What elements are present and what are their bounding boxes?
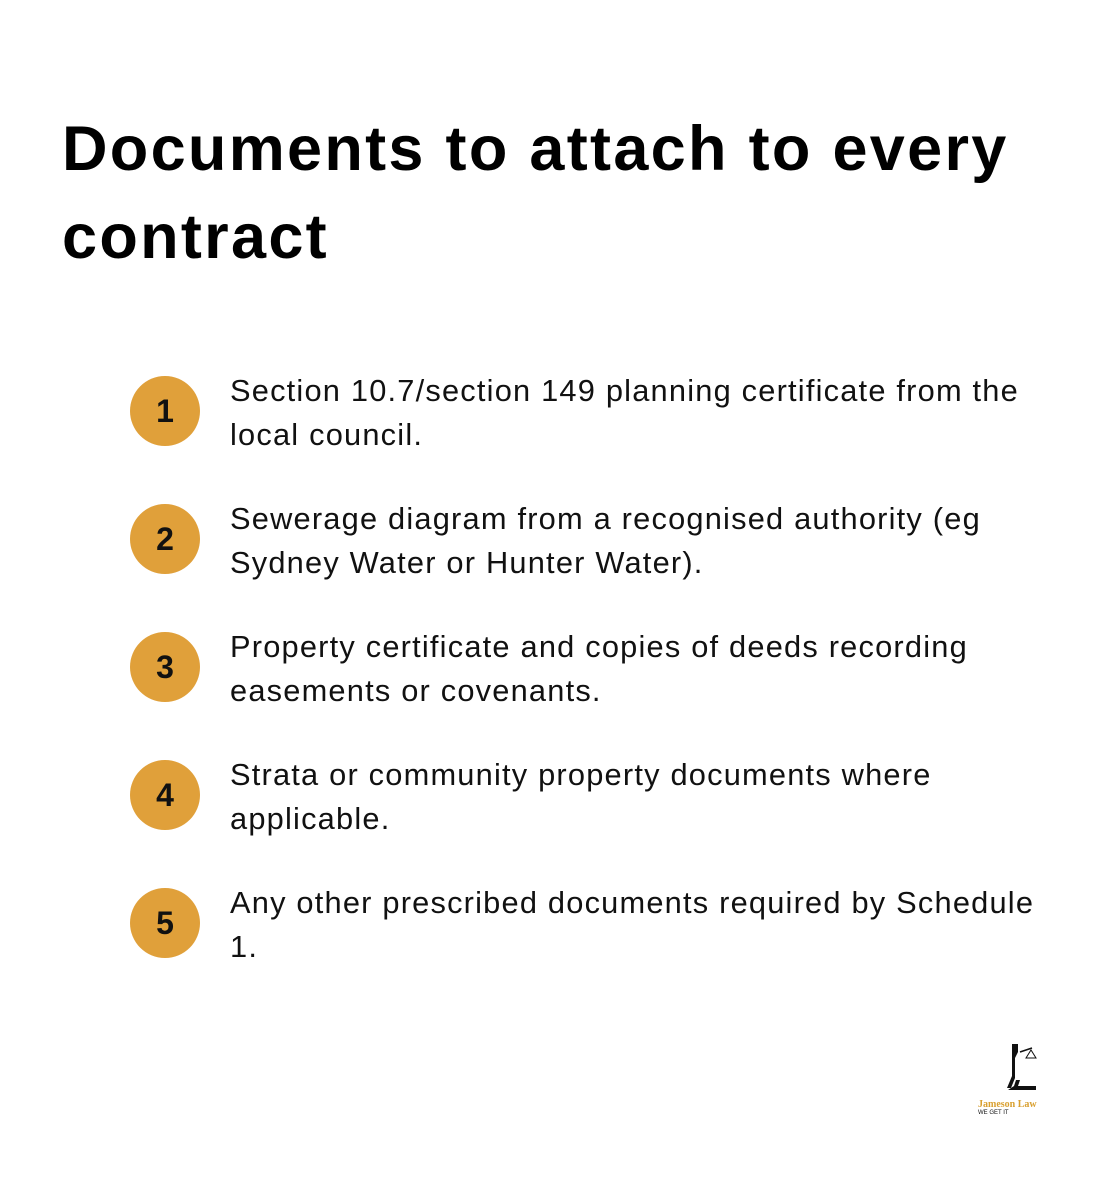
item 3: easements or covenants.	[230, 673, 602, 708]
item 5: 1.	[230, 929, 258, 964]
item 2: Sydney Water or Hunter Water).	[230, 545, 704, 580]
item 5: 5	[156, 905, 174, 941]
item 3	[130, 629, 968, 708]
item 1: 1	[156, 393, 174, 429]
title: contract	[62, 202, 329, 272]
title: Documents to attach to every	[62, 114, 1009, 184]
item 1: local council.	[230, 417, 423, 452]
item 3: 3	[156, 649, 174, 685]
title	[62, 114, 1009, 272]
item 4: applicable.	[230, 801, 390, 836]
item 2: Sewerage diagram from a recognised authority (eg	[230, 501, 981, 536]
item 1	[130, 373, 1019, 452]
item 2	[130, 501, 981, 580]
logo	[978, 1044, 1037, 1116]
logo: Jameson Law	[978, 1099, 1037, 1110]
item 3: Property certificate and copies of deeds recording	[230, 629, 968, 664]
item 1: Section 10.7/section 149 planning certificate from the	[230, 373, 1019, 408]
item 4	[130, 757, 932, 836]
item 4: 4	[156, 777, 174, 813]
item 4: Strata or community property documents where	[230, 757, 932, 792]
logo: WE GET IT	[978, 1110, 1009, 1116]
item 5: Any other prescribed documents required by Schedule	[230, 885, 1034, 920]
item 2: 2	[156, 521, 174, 557]
item 5	[130, 885, 1034, 964]
